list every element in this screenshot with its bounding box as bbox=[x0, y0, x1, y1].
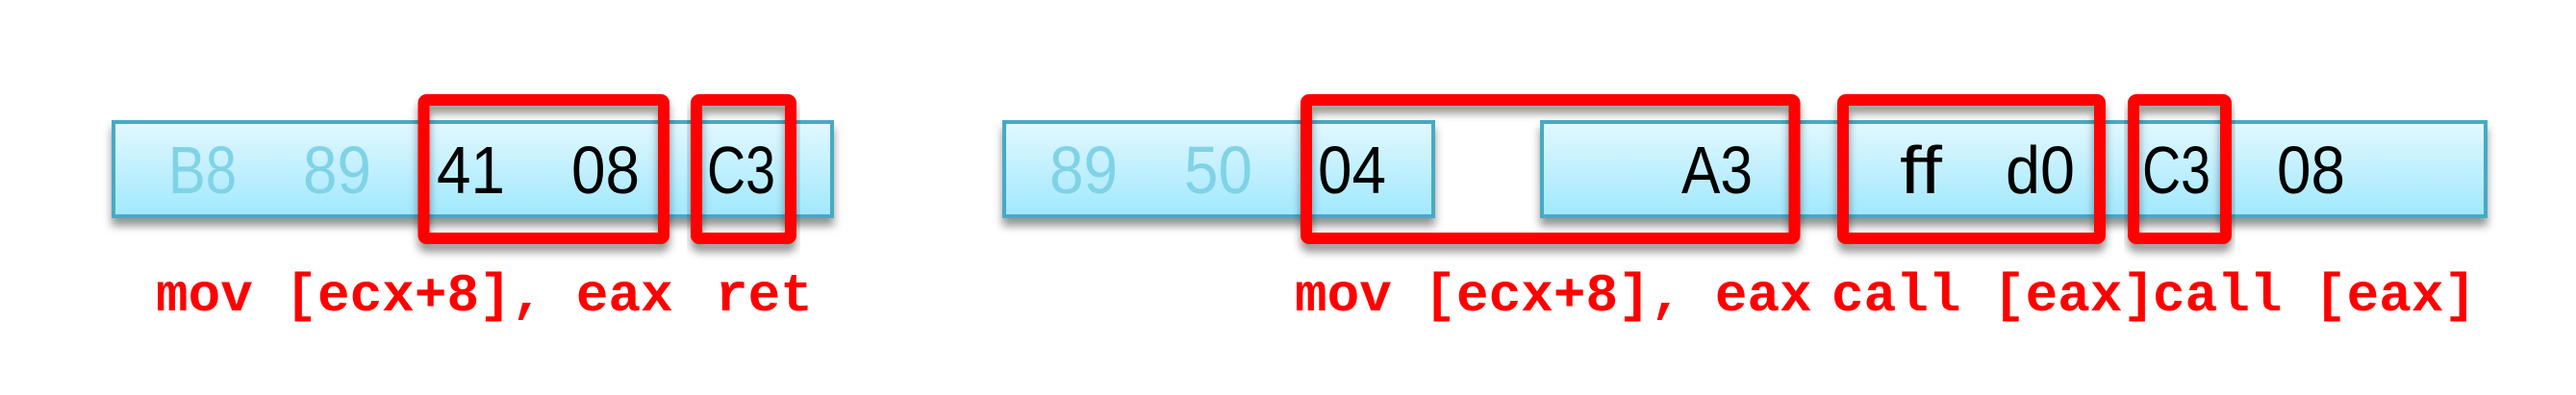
red highlight: C3 bbox=[2134, 100, 2226, 238]
bytes ff d0 bbox=[1900, 133, 2075, 208]
byte A3: A3 bbox=[1681, 133, 1753, 208]
byte 04: 04 bbox=[1318, 133, 1386, 208]
red highlight: C3 bbox=[696, 100, 791, 238]
byte C3: C3 bbox=[707, 133, 775, 208]
label: call [eax]: call [eax] bbox=[1831, 265, 2155, 327]
label: ret: ret bbox=[716, 265, 813, 327]
byte bar: left bbox=[114, 122, 832, 216]
faded bytes 89 50: 50 bbox=[1184, 133, 1252, 208]
red highlight: ff d0 bbox=[1843, 100, 2100, 238]
byte bar: right first part bbox=[1004, 122, 1433, 216]
byte bar: right second part bbox=[1542, 122, 2486, 216]
bytes 41 08: 41 bbox=[437, 133, 505, 208]
faded bytes B8 89 bbox=[168, 133, 371, 208]
faded bytes B8 89: B8 bbox=[168, 133, 237, 208]
byte C3: C3 bbox=[2142, 133, 2210, 208]
red highlight: 41 08 bbox=[423, 100, 664, 238]
label: mov [ecx+8], eax: mov [ecx+8], eax bbox=[156, 265, 673, 327]
bytes ff d0: d0 bbox=[2006, 133, 2075, 208]
bytes 41 08 bbox=[437, 133, 640, 208]
red highlight: 04 A3 bbox=[1306, 100, 1795, 238]
panel: left byte sequence bbox=[114, 100, 832, 327]
faded bytes 89 50 bbox=[1049, 133, 1252, 208]
bytes ff d0: ff bbox=[1900, 133, 1943, 208]
faded bytes 89 50: 89 bbox=[1049, 133, 1118, 208]
byte 08: 08 bbox=[2277, 133, 2345, 208]
label: mov [ecx+8], eax: mov [ecx+8], eax bbox=[1295, 265, 1812, 327]
panel: right byte sequence bbox=[1004, 100, 2486, 327]
label: call [eax]: call [eax] bbox=[2153, 265, 2476, 327]
bytes 41 08: 08 bbox=[571, 133, 640, 208]
faded bytes B8 89: 89 bbox=[303, 133, 371, 208]
